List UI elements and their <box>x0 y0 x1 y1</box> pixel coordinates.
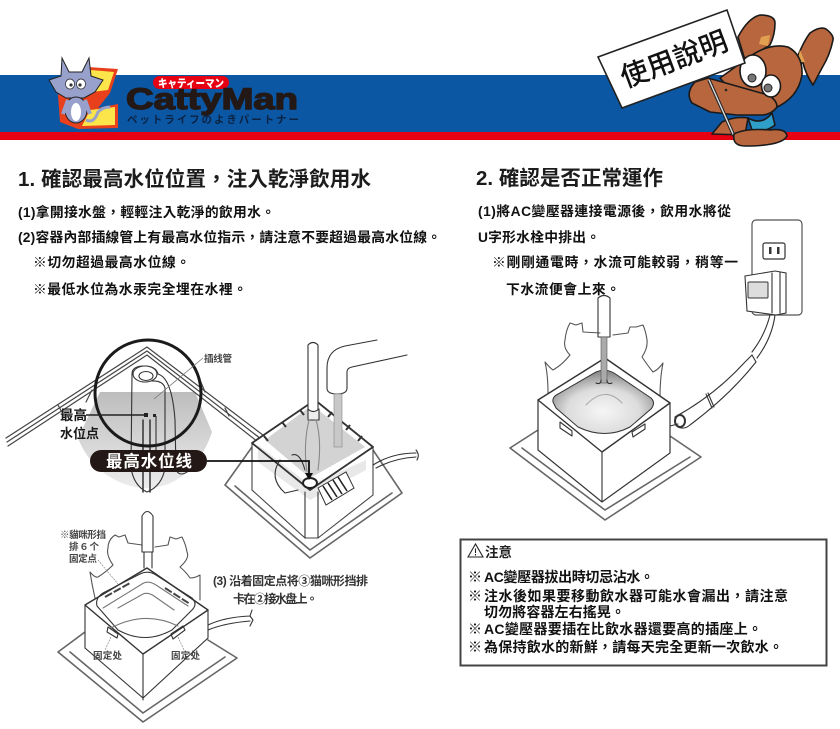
icon: cat mascot <box>49 58 110 123</box>
caution items: AC變壓器拔出時切忌沾水。 <box>484 569 654 585</box>
water stream <box>334 394 342 447</box>
section 1 instructions <box>18 204 441 297</box>
caution box <box>460 540 826 666</box>
step 3 text: 卡在②接水盘上。 <box>233 591 318 606</box>
icon: yellow C <box>58 67 118 129</box>
box rim <box>252 400 373 490</box>
mascot: dog with sign <box>598 10 833 146</box>
caution items: ※ <box>468 639 482 655</box>
label: highest point <box>60 407 99 441</box>
section 2 instructions: (1)將AC變壓器連接電源後，飲用水將從 <box>478 203 731 219</box>
caution items: 為保持飲水的新鮮，請每天完全更新一次飲水。 <box>484 639 783 655</box>
label: highest point: 水位点 <box>60 426 99 441</box>
illustration: open fountain box with pump <box>225 340 418 558</box>
label: cat clip note: 固定点 <box>69 553 97 565</box>
water shade <box>265 405 365 478</box>
label pill: maximum water line: 最高水位线 <box>106 451 192 471</box>
tabs <box>107 626 185 639</box>
caution items: ※ <box>468 588 482 604</box>
cable <box>373 450 418 468</box>
illustration: maximum water level detail <box>6 340 276 492</box>
arrow to box <box>207 461 313 480</box>
section 2 instructions: ※剛剛通電時，水流可能較弱，稍等一 <box>492 254 738 270</box>
label: fixing point right: 固定处 <box>171 650 200 662</box>
caution items: 注水後如果要移動飲水器可能水會漏出，請注意 <box>484 588 788 604</box>
leaders <box>98 560 184 650</box>
label: cat clip note: ※貓咪形挡 <box>60 529 106 541</box>
section 2 instructions: 下水流便會上來。 <box>506 281 620 297</box>
red badge: キャティーマン: キャティーマン <box>158 75 224 91</box>
caution items: AC變壓器要插在比飲水器還要高的插座上。 <box>484 621 762 637</box>
tray <box>510 430 701 520</box>
label pill: maximum water line <box>90 450 207 472</box>
dog paw <box>734 130 787 146</box>
wall plate <box>752 220 802 315</box>
section 1 instructions: ※最低水位為水汞完全埋在水裡。 <box>33 281 247 297</box>
tagline: ペットライフのよきパートナー <box>127 112 299 127</box>
vertical bar <box>305 492 318 538</box>
cat-shaped clips <box>90 535 200 600</box>
pipe elbow <box>327 340 407 394</box>
water bowl <box>553 370 654 434</box>
section 1 heading: 1. 確認最高水位位置，注入乾淨飲用水 <box>18 167 372 191</box>
caution items: ※ <box>468 569 482 585</box>
sign pole <box>709 80 734 136</box>
cat clips <box>545 323 663 397</box>
section 1 instructions: (2)容器內部插線管上有最高水位指示，請注意不要超過最高水位線。 <box>18 229 441 245</box>
spout <box>142 512 153 568</box>
spout <box>305 342 320 472</box>
label: highest point: 最高 <box>60 407 87 423</box>
label: fixing point left: 固定处 <box>93 650 122 662</box>
tabs <box>560 422 645 437</box>
tube coil <box>275 455 305 493</box>
spout and stream <box>596 296 612 384</box>
rim pipes <box>6 347 276 453</box>
label: tube: 插线管 <box>204 353 232 365</box>
magnifier circle <box>95 340 201 446</box>
box <box>85 568 208 698</box>
rim <box>538 358 670 452</box>
tray <box>58 632 237 722</box>
caution items: 切勿將容器左右搖晃。 <box>484 604 625 620</box>
tray <box>225 447 402 558</box>
section 2 instructions: U字形水栓中排出。 <box>478 229 600 245</box>
section 2 instructions <box>478 203 738 297</box>
caution items: ※ <box>468 621 482 637</box>
label: cat clip note <box>60 529 106 565</box>
cable <box>208 610 253 630</box>
step 3 text <box>213 573 368 606</box>
leader to tube label <box>154 358 203 399</box>
logo: CattyMan <box>49 58 299 129</box>
illustration: installing cat clips <box>58 512 253 722</box>
illustration: running fountain with adapter <box>510 220 802 520</box>
leader: highest point <box>86 414 146 416</box>
pump <box>318 472 354 505</box>
icon: dog <box>689 15 833 135</box>
section 1 instructions: ※切勿超過最高水位線。 <box>33 254 190 270</box>
box faces <box>252 400 373 538</box>
section 2 heading: 2. 確認是否正常運作 <box>476 167 663 190</box>
gray fan highlight <box>78 392 212 488</box>
caution heading <box>468 544 512 560</box>
caution items <box>468 569 788 655</box>
wordmark: CattyMan <box>126 83 298 116</box>
step 3 text: (3) 沿着固定点将③猫咪形挡排 <box>213 573 368 588</box>
power cord <box>670 315 775 428</box>
inner tube <box>131 366 190 492</box>
sign board <box>598 10 745 108</box>
caution heading: 注意 <box>485 544 512 560</box>
rim <box>85 568 208 654</box>
section 1 instructions: (1)拿開接水盤，輕輕注入乾淨的飲用水。 <box>18 204 275 220</box>
label: cat clip note: 排６个 <box>69 541 99 553</box>
sign text: 使用說明 <box>616 25 732 94</box>
box <box>538 358 670 502</box>
header band <box>0 75 840 140</box>
AC adapter <box>745 271 786 315</box>
